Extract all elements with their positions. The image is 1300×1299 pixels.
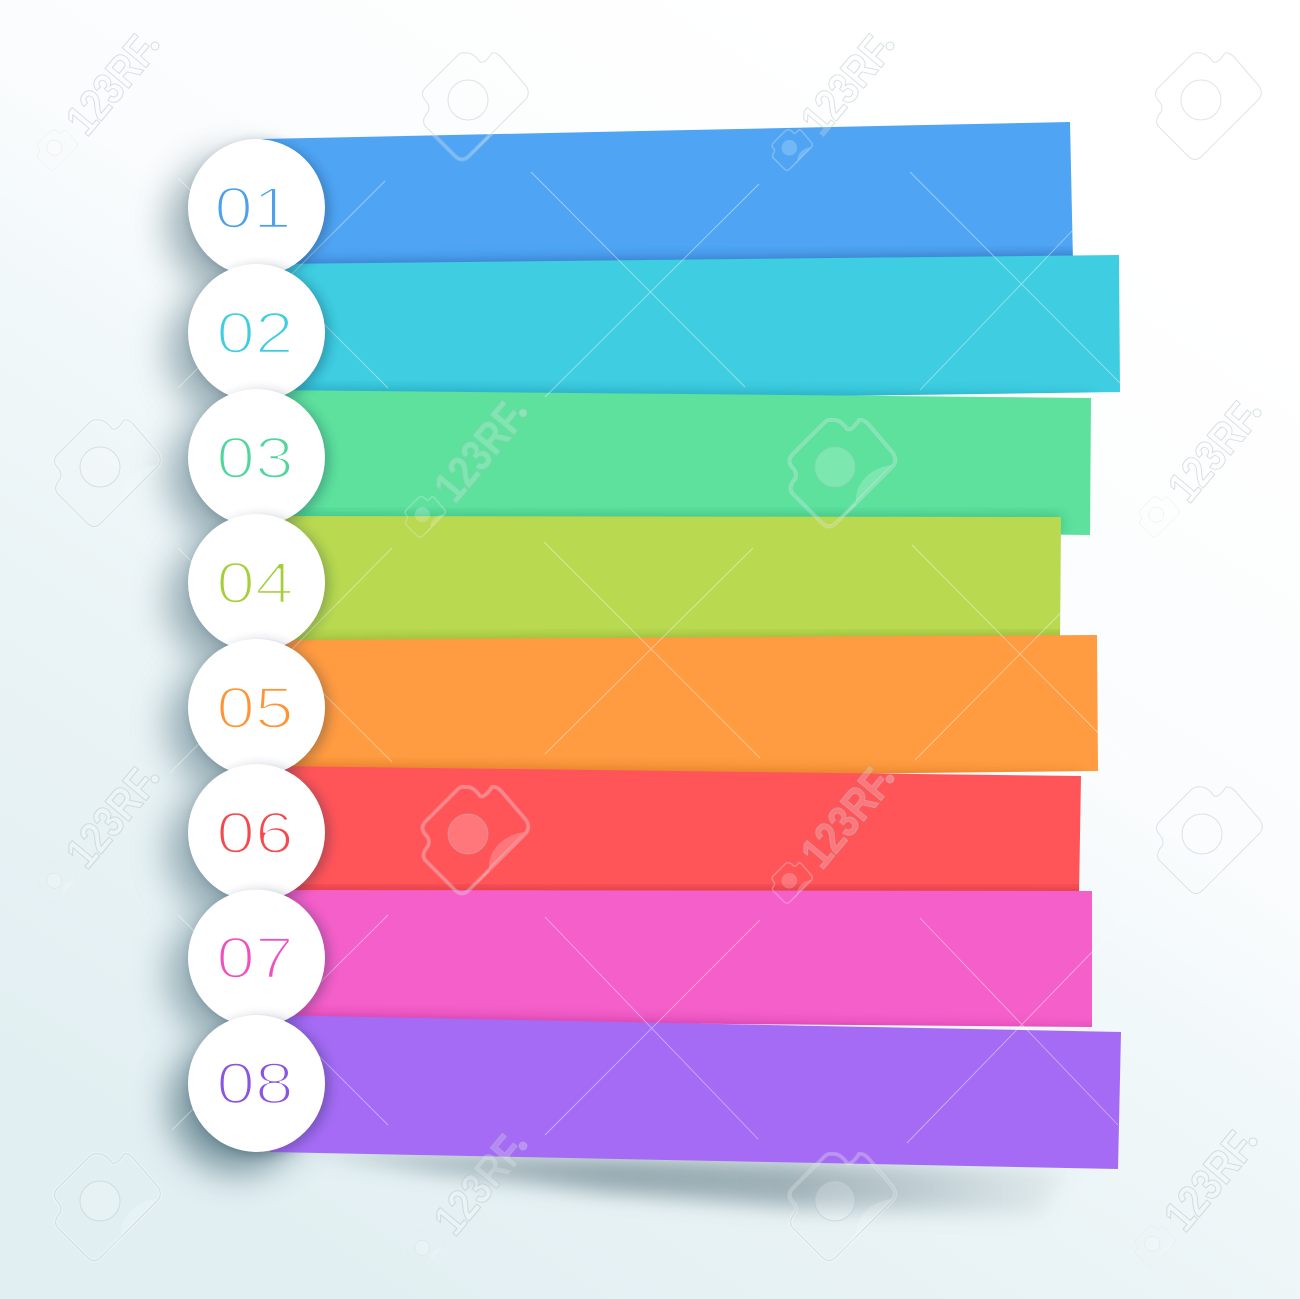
banner 06 red [270, 766, 1081, 895]
number badge 05 [188, 639, 329, 778]
banner 02 shadow from banner 03 [294, 384, 1086, 396]
number badge 02: 02 [216, 300, 294, 366]
banner 08 purple [270, 1015, 1121, 1169]
watermark logos: 123RF [1158, 393, 1269, 511]
banner 07 shadow from banner 08 [294, 1010, 1092, 1027]
banner 02 teal [270, 255, 1120, 404]
banner stack [262, 122, 1121, 1169]
watermark lattice lines [170, 172, 1125, 1143]
cast shadows behind the stack [168, 157, 1070, 1214]
watermark logos: 123RF [424, 1126, 535, 1244]
banner 03 shadow from banner 04 [270, 514, 1061, 535]
banner 04 shadow from banner 05 [294, 630, 1060, 640]
banner 03 green [270, 390, 1091, 535]
number badge 03: 03 [216, 425, 294, 491]
number badge 02 [188, 264, 329, 403]
banner 01 shadow from banner 02 [296, 248, 1073, 264]
number badge 08 [188, 1015, 329, 1154]
banner 06 shadow from banner 07 [294, 884, 1080, 891]
banner 05 shadow from banner 06 [292, 760, 1076, 774]
watermark logos: 123RF [424, 393, 535, 511]
banner 04 lime [270, 516, 1061, 645]
watermark logos: 123RF [791, 759, 902, 877]
number badge 07 [188, 890, 329, 1028]
number badge 01 [188, 139, 329, 278]
number badge 06 [188, 764, 329, 903]
number badge 08: 08 [216, 1051, 294, 1116]
number badge 07: 07 [216, 925, 294, 991]
watermark logos: 123RF [791, 26, 902, 144]
number badge 01: 01 [214, 175, 292, 241]
watermark logos: 123RF [56, 759, 167, 877]
number badge 03 [188, 389, 329, 528]
number badge 06: 06 [216, 800, 294, 866]
number badge 04: 04 [216, 550, 294, 616]
banner 05 orange [270, 635, 1098, 780]
watermark logos: 123RF [1154, 1122, 1265, 1240]
banner 07 pink [270, 890, 1092, 1027]
watermark logos: 123RF [56, 26, 167, 144]
number badge 05: 05 [216, 675, 294, 741]
number badge 04 [188, 514, 329, 653]
banner 01 blue [262, 122, 1073, 275]
